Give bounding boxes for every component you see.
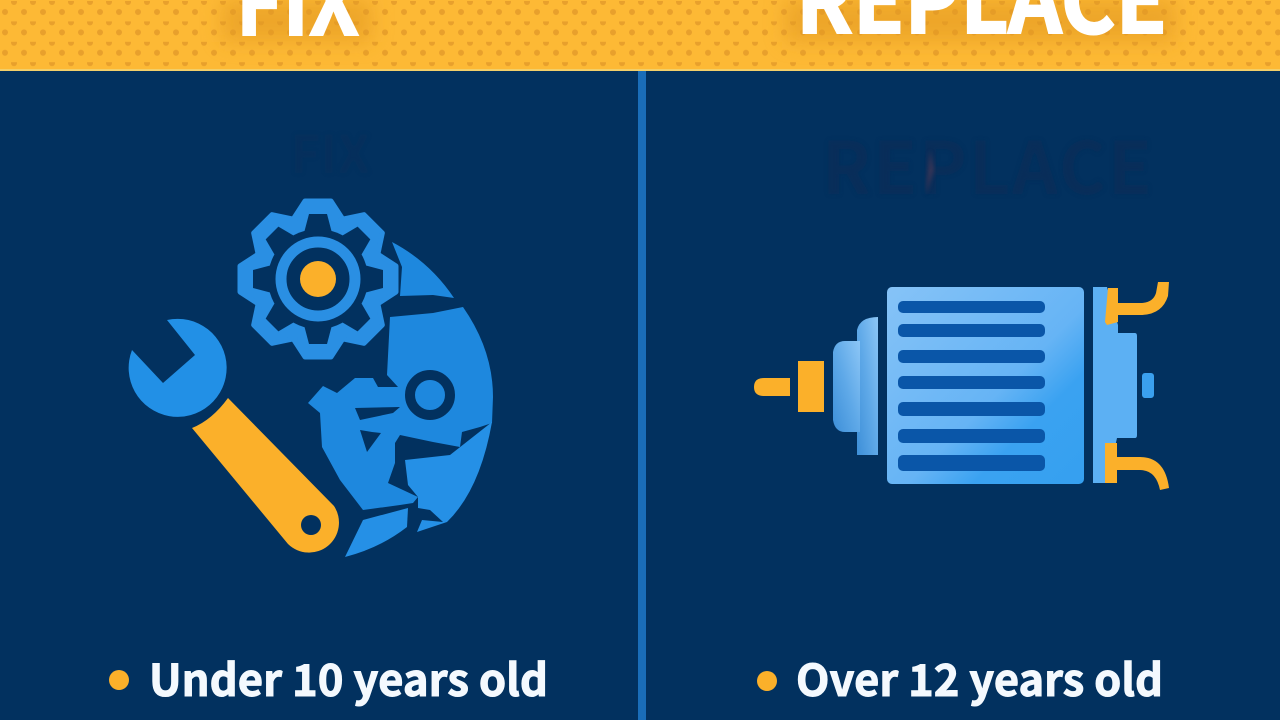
motor bottom terminal (1105, 443, 1169, 490)
motor left caps (833, 317, 878, 455)
icon: globe with wrench and gear (129, 201, 493, 557)
header band (0, 0, 1280, 71)
bullet: Under 10 years old: Under 10 years old (149, 645, 548, 709)
center divider (638, 71, 646, 720)
motor right end plate (1093, 287, 1137, 483)
globe dark channels (355, 407, 400, 452)
motor right pin (1142, 373, 1154, 398)
ghost text: FIX: FIX (290, 113, 370, 188)
bullet: Over 12 years old: Over 12 years old (796, 645, 1163, 709)
wrench handle (192, 398, 339, 553)
ghost text: REPLACE: REPLACE (822, 110, 1152, 215)
gear (240, 201, 396, 357)
globe ring (410, 375, 450, 415)
icon: electric motor (754, 282, 1169, 490)
motor body (887, 287, 1084, 484)
motor shaft (754, 361, 824, 412)
motor vents (898, 301, 1045, 471)
wrench head (129, 319, 227, 417)
globe map shapes (308, 242, 493, 557)
motor top terminal (1105, 282, 1169, 325)
